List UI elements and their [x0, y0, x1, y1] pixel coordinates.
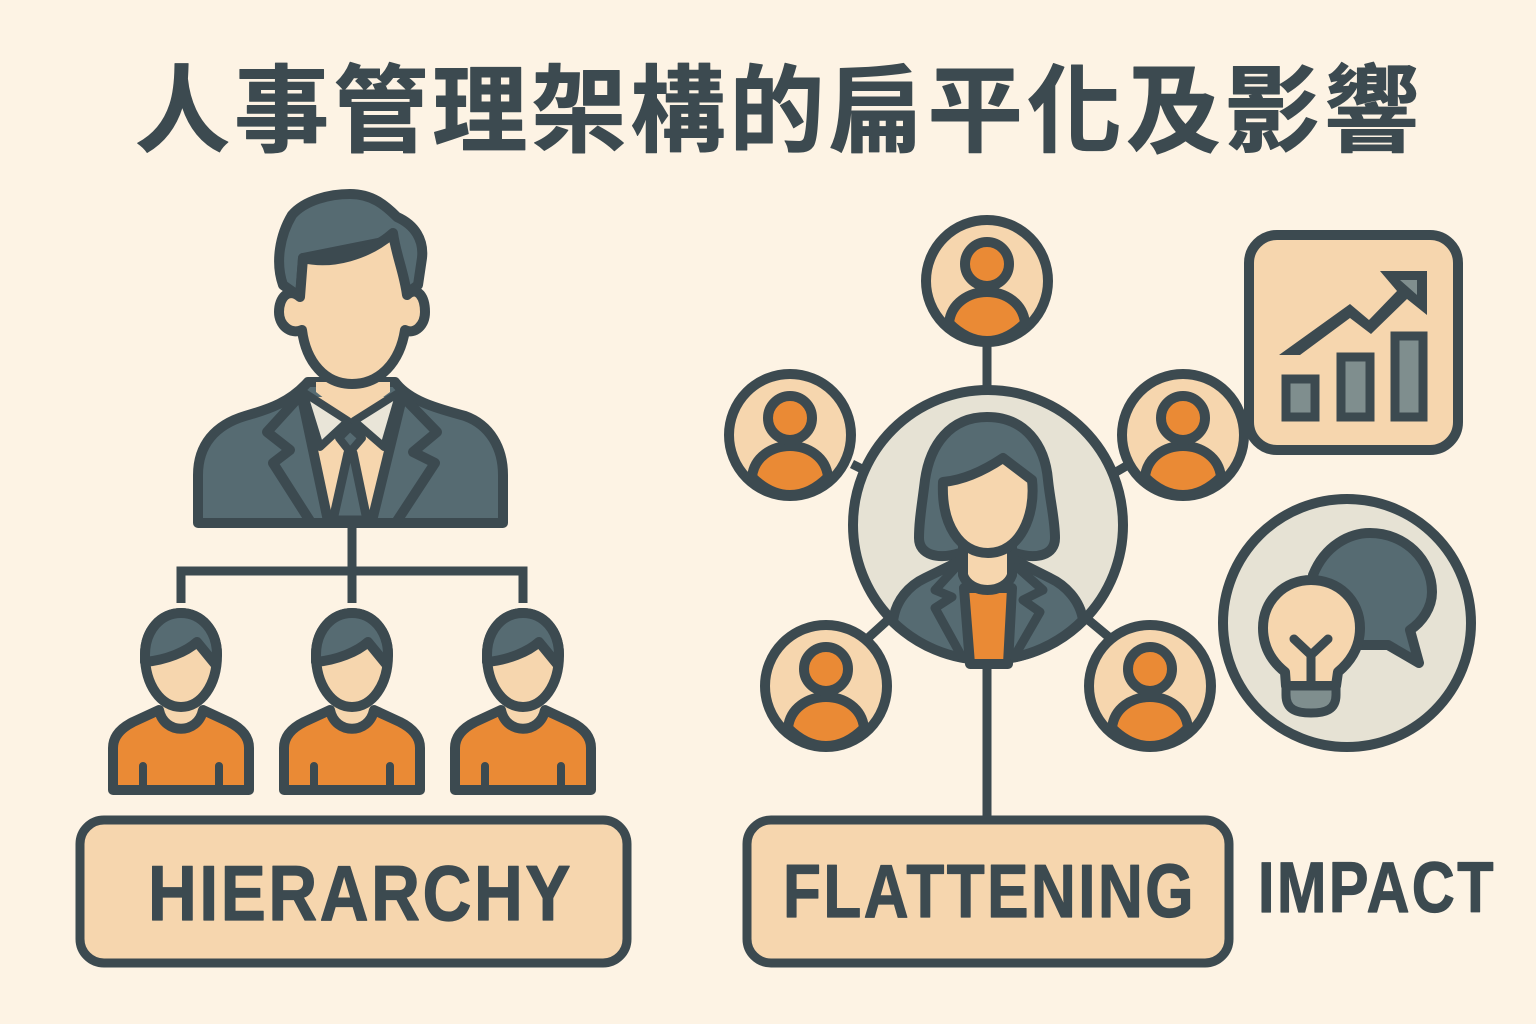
team member top — [926, 220, 1048, 342]
network connectors — [852, 345, 1128, 820]
icon: idea and communication — [1223, 499, 1471, 747]
flattening label: FLATTENING — [783, 849, 1196, 933]
employee 1 — [113, 613, 249, 790]
org chart connector — [181, 525, 523, 603]
team member lower right — [1089, 625, 1211, 747]
hierarchy label — [80, 820, 627, 963]
flattening label — [747, 820, 1229, 963]
icon: growth chart — [1249, 235, 1458, 450]
title: 人事管理架構的扁平化及影響 — [135, 59, 1419, 165]
team member lower left — [765, 625, 887, 747]
manager figure — [198, 194, 503, 523]
employee 2 — [284, 613, 420, 790]
central manager circle — [853, 390, 1123, 664]
employee 3 — [455, 613, 591, 790]
team member right — [1122, 374, 1244, 496]
impact label: IMPACT — [1258, 849, 1496, 928]
hierarchy label: HIERARCHY — [148, 849, 573, 937]
team member left — [729, 374, 851, 496]
